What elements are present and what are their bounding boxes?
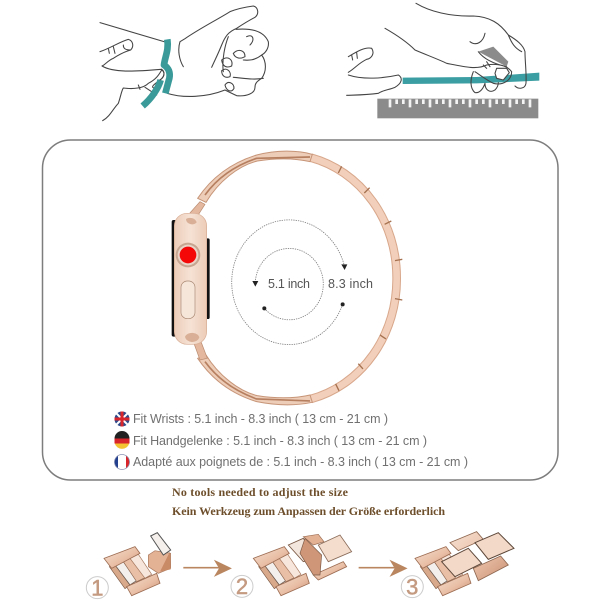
watch case	[172, 220, 176, 337]
step 1 number	[86, 575, 108, 600]
grey shadow and thumbnail	[478, 47, 508, 67]
inner dashed arc	[255, 248, 323, 320]
text: French fit: Adapté aux poignets de : 5.1 inch - 8.3 inch ( 13 cm - 21 cm )	[133, 455, 468, 469]
arrow 1	[183, 562, 230, 575]
teal measuring band	[143, 39, 170, 106]
step 1 number: 1	[91, 575, 103, 600]
steps row	[86, 532, 514, 600]
step 1 link	[104, 533, 171, 596]
text: English fit: Fit Wrists : 5.1 inch - 8.3 inch ( 13 cm - 21 cm )	[133, 412, 388, 426]
bracelet bottom left arc	[198, 355, 312, 405]
heading: no tools: No tools needed to adjust the size	[172, 485, 349, 499]
step 2 link	[253, 534, 352, 596]
icon: UK flag	[114, 412, 130, 426]
text: German fit: Fit Handgelenke : 5.1 inch - 8.3 inch ( 13 cm - 21 cm )	[133, 434, 427, 448]
illustration: reading strip on ruler	[347, 3, 539, 118]
label: 5.1 inch: 5.1 inch	[268, 277, 310, 291]
lugs	[187, 202, 207, 360]
hands	[347, 3, 526, 95]
bracelet top left arc	[198, 151, 312, 202]
teal strip	[403, 73, 539, 84]
circular size diagram	[232, 220, 347, 345]
icon: French flag	[114, 454, 130, 470]
step 3 number	[401, 574, 423, 599]
step 3 number: 3	[406, 574, 418, 599]
arrow 2	[359, 562, 406, 575]
side button	[181, 281, 195, 319]
arrows and dots	[252, 264, 347, 287]
ruler	[377, 99, 538, 118]
step 2 number	[231, 574, 253, 599]
crown with red dot	[176, 243, 200, 267]
illustration: measuring wrist with strip	[100, 6, 268, 121]
watch with bracelet	[172, 151, 402, 405]
thumb and fingers of measuring hand	[100, 39, 164, 121]
step 3 link	[415, 532, 514, 596]
outer dashed arc	[232, 220, 344, 345]
bracelet right links	[311, 158, 402, 399]
icon: German flag	[114, 431, 130, 449]
label: 8.3 inch: 8.3 inch	[328, 277, 373, 291]
arm and fist outline	[100, 6, 268, 96]
panel: fit size frame	[42, 140, 558, 480]
heading: kein Werkzeug: Kein Werkzeug zum Anpassen der Größe erforderlich	[172, 504, 445, 518]
step 2 number: 2	[236, 574, 248, 599]
